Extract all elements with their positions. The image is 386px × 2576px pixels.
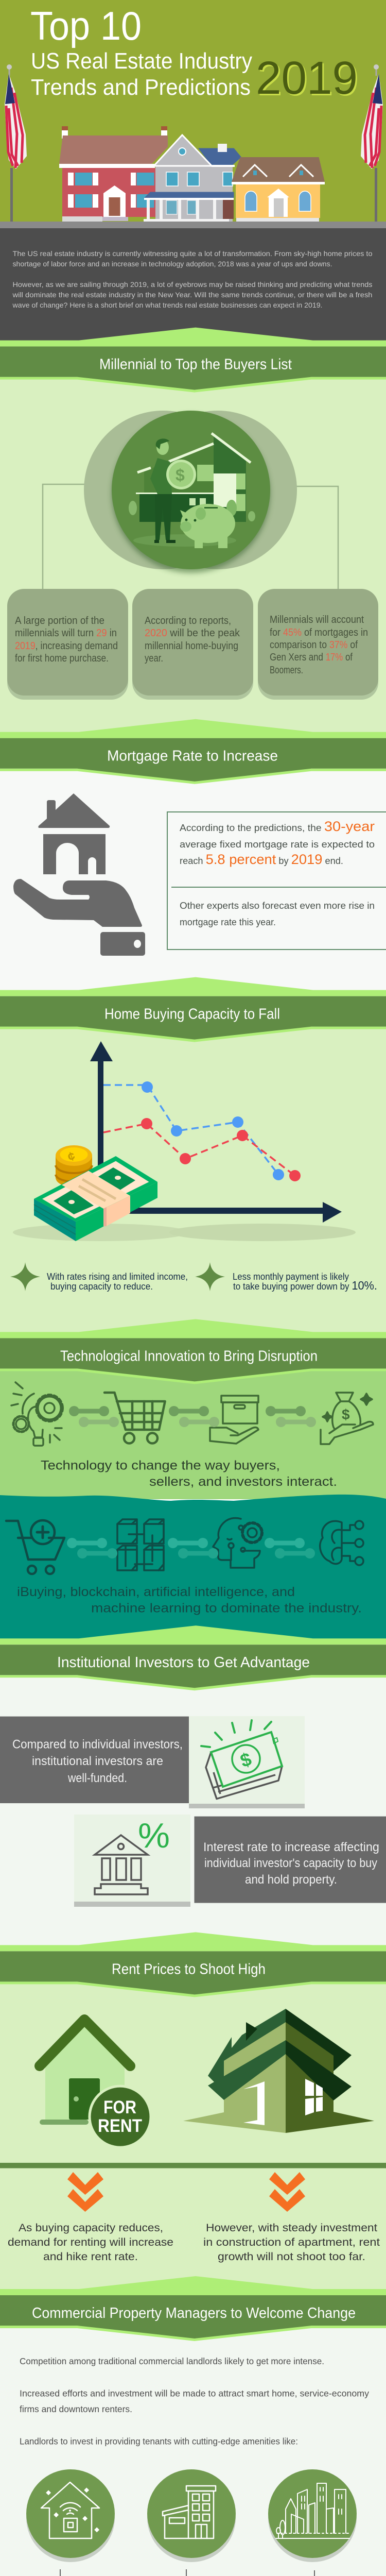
card: mortgage share: comparison to 37% of <box>270 639 358 651</box>
icon: right flag <box>361 64 383 222</box>
note: buying power down 10%: to take buying power down by 10%. <box>233 1279 377 1292</box>
icon: coin stack: ¢ <box>66 1149 77 1164</box>
icon: house for rent: RENT <box>98 2116 142 2136</box>
heading: Home Buying Capacity to Fall: Home Buying Capacity to Fall <box>104 1006 280 1022</box>
note: buying power down 10%: Less monthly payment is likely <box>233 1272 349 1282</box>
icon: house for rent <box>40 2020 152 2149</box>
note: rates and income: buying capacity to reduce. <box>50 1281 153 1292</box>
callout: rate forecast: average fixed mortgage rate is expected to <box>180 839 375 850</box>
card: well-funded: institutional investors are <box>32 1754 163 1768</box>
card: age 29: A large portion of the <box>15 615 104 626</box>
icon: blockchain cubes <box>117 1519 164 1570</box>
icon: hand holding house <box>13 793 145 956</box>
title: Trends and Predictions <box>31 75 251 100</box>
heading: Technological Innovation to Bring Disruption: Technological Innovation to Bring Disruption <box>60 1348 318 1364</box>
icon: double chevron right <box>269 2172 305 2212</box>
text: technology change: sellers, and investors interact. <box>149 1475 337 1489</box>
card: peak year 2020: millennial home-buying <box>145 640 238 652</box>
icon: banknote bundle <box>34 1156 157 1241</box>
icon: bank with percent panel: % <box>138 1816 170 1855</box>
red house <box>59 126 168 222</box>
text: rent growth: in construction of apartment, rent <box>203 2236 380 2248</box>
heading: Institutional Investors to Get Advantage: Institutional Investors to Get Advantage <box>57 1654 310 1671</box>
text: commercial points <box>20 2356 369 2447</box>
panel: mortgage rate <box>13 793 386 956</box>
text: commercial points: Competition among traditional commercial landlords likely to get more intense. <box>20 2356 324 2366</box>
heading: Millennial to Top the Buyers List <box>0 328 386 393</box>
icon: office building <box>147 2469 236 2562</box>
year 2019: 2019 <box>257 54 359 106</box>
card: age 29: millennials will turn 29 in <box>15 628 117 639</box>
icon: bank with percent panel <box>74 1815 190 1907</box>
panel: technology interaction <box>11 1382 373 1489</box>
callout: rate forecast: Other experts also forecast even more rise in <box>180 901 375 911</box>
card: interest rate <box>195 1817 386 1903</box>
icon: hand holding box <box>210 1396 258 1444</box>
intro text: shortage of labor force and an increase in technology adoption, 2018 was a year of ups and downs. <box>12 260 332 268</box>
icon: shopping cart <box>104 1393 165 1444</box>
text: rent growth: However, with steady investment <box>206 2222 377 2234</box>
note: rates and income <box>10 1262 188 1292</box>
card: peak year 2020: 2020 will be the peak <box>145 628 240 639</box>
icon: apartment under construction <box>183 2009 374 2133</box>
year 2019: 2019 <box>256 53 358 104</box>
text: rent growth <box>203 2222 380 2263</box>
panel: rent prices <box>0 2009 386 2263</box>
text: iBuying and AI: iBuying, blockchain, artificial intelligence, and <box>17 1585 295 1599</box>
text: renting demand <box>8 2222 173 2263</box>
heading: Millennial to Top the Buyers List: Millennial to Top the Buyers List <box>99 357 292 373</box>
yellow house <box>232 157 325 222</box>
callout: rate forecast: reach 5.8 percent by 2019 end. <box>180 852 343 867</box>
circle backdrop <box>84 411 297 569</box>
text: technology change <box>41 1458 337 1489</box>
card: well-funded: Compared to individual investors, <box>12 1737 183 1752</box>
heading: Rent Prices to Shoot High <box>0 1932 386 1997</box>
intro text: wave of change? Here is a short brief on what trends real estate businesses can expect in 2019. <box>12 301 322 309</box>
grey house <box>144 135 241 222</box>
title: US Real Estate Industry <box>31 48 252 74</box>
text: commercial points: Increased efforts and investment will be made to attract smart home, service-economy <box>20 2388 369 2399</box>
heading: Mortgage Rate to Increase <box>0 719 386 784</box>
card: interest rate: Interest rate to increase affecting <box>203 1840 379 1854</box>
heading: Commercial Property Managers to Welcome Change: Commercial Property Managers to Welcome Change <box>32 2305 356 2321</box>
card: peak year 2020 <box>132 589 253 700</box>
text: iBuying and AI: machine learning to dominate the industry. <box>91 1601 362 1616</box>
panel: buying capacity <box>10 1041 377 1292</box>
heading: Institutional Investors to Get Advantage <box>0 1625 386 1690</box>
card: mortgage share: for 45% of mortgages in <box>270 627 368 638</box>
connectors: light-green dumbbells <box>69 1406 316 1427</box>
chart: falling capacity line chart <box>13 1041 356 1241</box>
callout: rate forecast: According to the predictions, the 30-year <box>180 819 375 834</box>
title <box>30 3 252 100</box>
panel: emerging technologies <box>6 1518 363 1616</box>
heading: Mortgage Rate to Increase: Mortgage Rate to Increase <box>107 748 278 765</box>
icon: house for rent: FOR <box>103 2097 136 2117</box>
card: well-funded <box>0 1717 189 1803</box>
heading: Commercial Property Managers to Welcome Change <box>0 2276 386 2341</box>
heading: Home Buying Capacity to Fall <box>0 977 386 1042</box>
divider bar <box>0 2163 386 2168</box>
icon: iBuying cart <box>6 1520 64 1574</box>
text: rent growth: growth will not shoot too far. <box>218 2250 365 2263</box>
text: iBuying and AI <box>17 1585 362 1616</box>
icon: brain network <box>320 1521 363 1565</box>
panel: commercial property <box>8 2356 380 2576</box>
card: mortgage share: Gen Xers and 17% of <box>270 652 353 663</box>
card: peak year 2020: year. <box>145 653 163 664</box>
callout: rate forecast: mortgage rate this year. <box>180 917 276 927</box>
icons: bulb, cart, box, money bag <box>11 1382 373 1446</box>
icon: city skyline <box>268 2469 357 2562</box>
icon: left flag <box>5 64 27 222</box>
title: Top 10 <box>30 3 142 48</box>
icon: smart home <box>26 2469 115 2562</box>
icon: AI head with gear <box>213 1518 262 1568</box>
illustration: man with coin and piggy bank: $ <box>176 466 185 484</box>
heading: Rent Prices to Shoot High: Rent Prices to Shoot High <box>112 1961 266 1977</box>
illustration: man with coin and piggy bank <box>112 411 270 573</box>
text: renting demand: As buying capacity reduces, <box>19 2222 163 2234</box>
connector lines <box>43 484 338 589</box>
intro text: The US real estate industry is currently witnessing quite a lot of transformation. From sky-high home prices to <box>12 249 373 258</box>
card: age 29 <box>7 589 128 700</box>
intro text: will dominate the real estate industry in the New Year. Will the same trends continue, or there will be a fresh <box>12 291 373 299</box>
connector lines <box>33 2569 342 2576</box>
card: well-funded: well-funded. <box>67 1771 127 1785</box>
note: buying power down 10% <box>195 1262 377 1292</box>
card: mortgage share <box>258 589 378 700</box>
icon: banknotes panel: $ <box>238 1748 254 1771</box>
intro text <box>12 249 373 309</box>
icon: coin stack <box>56 1145 92 1187</box>
card: mortgage share: Millennials will account <box>270 614 364 625</box>
card: age 29: 2019, increasing demand <box>15 640 118 652</box>
card: peak year 2020: According to reports, <box>145 615 231 626</box>
panel: millennial buyers <box>7 411 378 700</box>
text: renting demand: demand for renting will increase <box>8 2236 173 2248</box>
card: mortgage share: Boomers. <box>270 665 303 676</box>
icon: double chevron left <box>67 2172 103 2212</box>
icon: hand holding money bag: $ <box>342 1406 350 1422</box>
intro text: However, as we are sailing through 2019, a lot of eyebrows may be raised thinking and predicting what trends <box>12 280 373 289</box>
text: commercial points: firms and downtown renters. <box>20 2404 132 2414</box>
icon: banknotes panel <box>189 1716 305 1808</box>
callout: rate forecast <box>167 812 386 950</box>
heading: Technological Innovation to Bring Disruption <box>0 1319 386 1384</box>
note: rates and income: With rates rising and limited income, <box>47 1272 188 1282</box>
icon: hand holding money bag <box>321 1393 373 1444</box>
connectors: teal dumbbells <box>67 1538 315 1558</box>
icon: bulb with gears <box>11 1382 62 1446</box>
panel: institutional investors <box>0 1716 386 1907</box>
illustration: row of houses <box>59 126 325 222</box>
card: interest rate: and hold property. <box>245 1873 337 1887</box>
text: commercial points: Landlords to invest in providing tenants with cutting-edge amenities like: <box>20 2436 298 2447</box>
text: renting demand: and hike rent rate. <box>43 2250 138 2263</box>
text: technology change: Technology to change the way buyers, <box>41 1458 280 1472</box>
card: age 29: for first home purchase. <box>15 653 109 664</box>
